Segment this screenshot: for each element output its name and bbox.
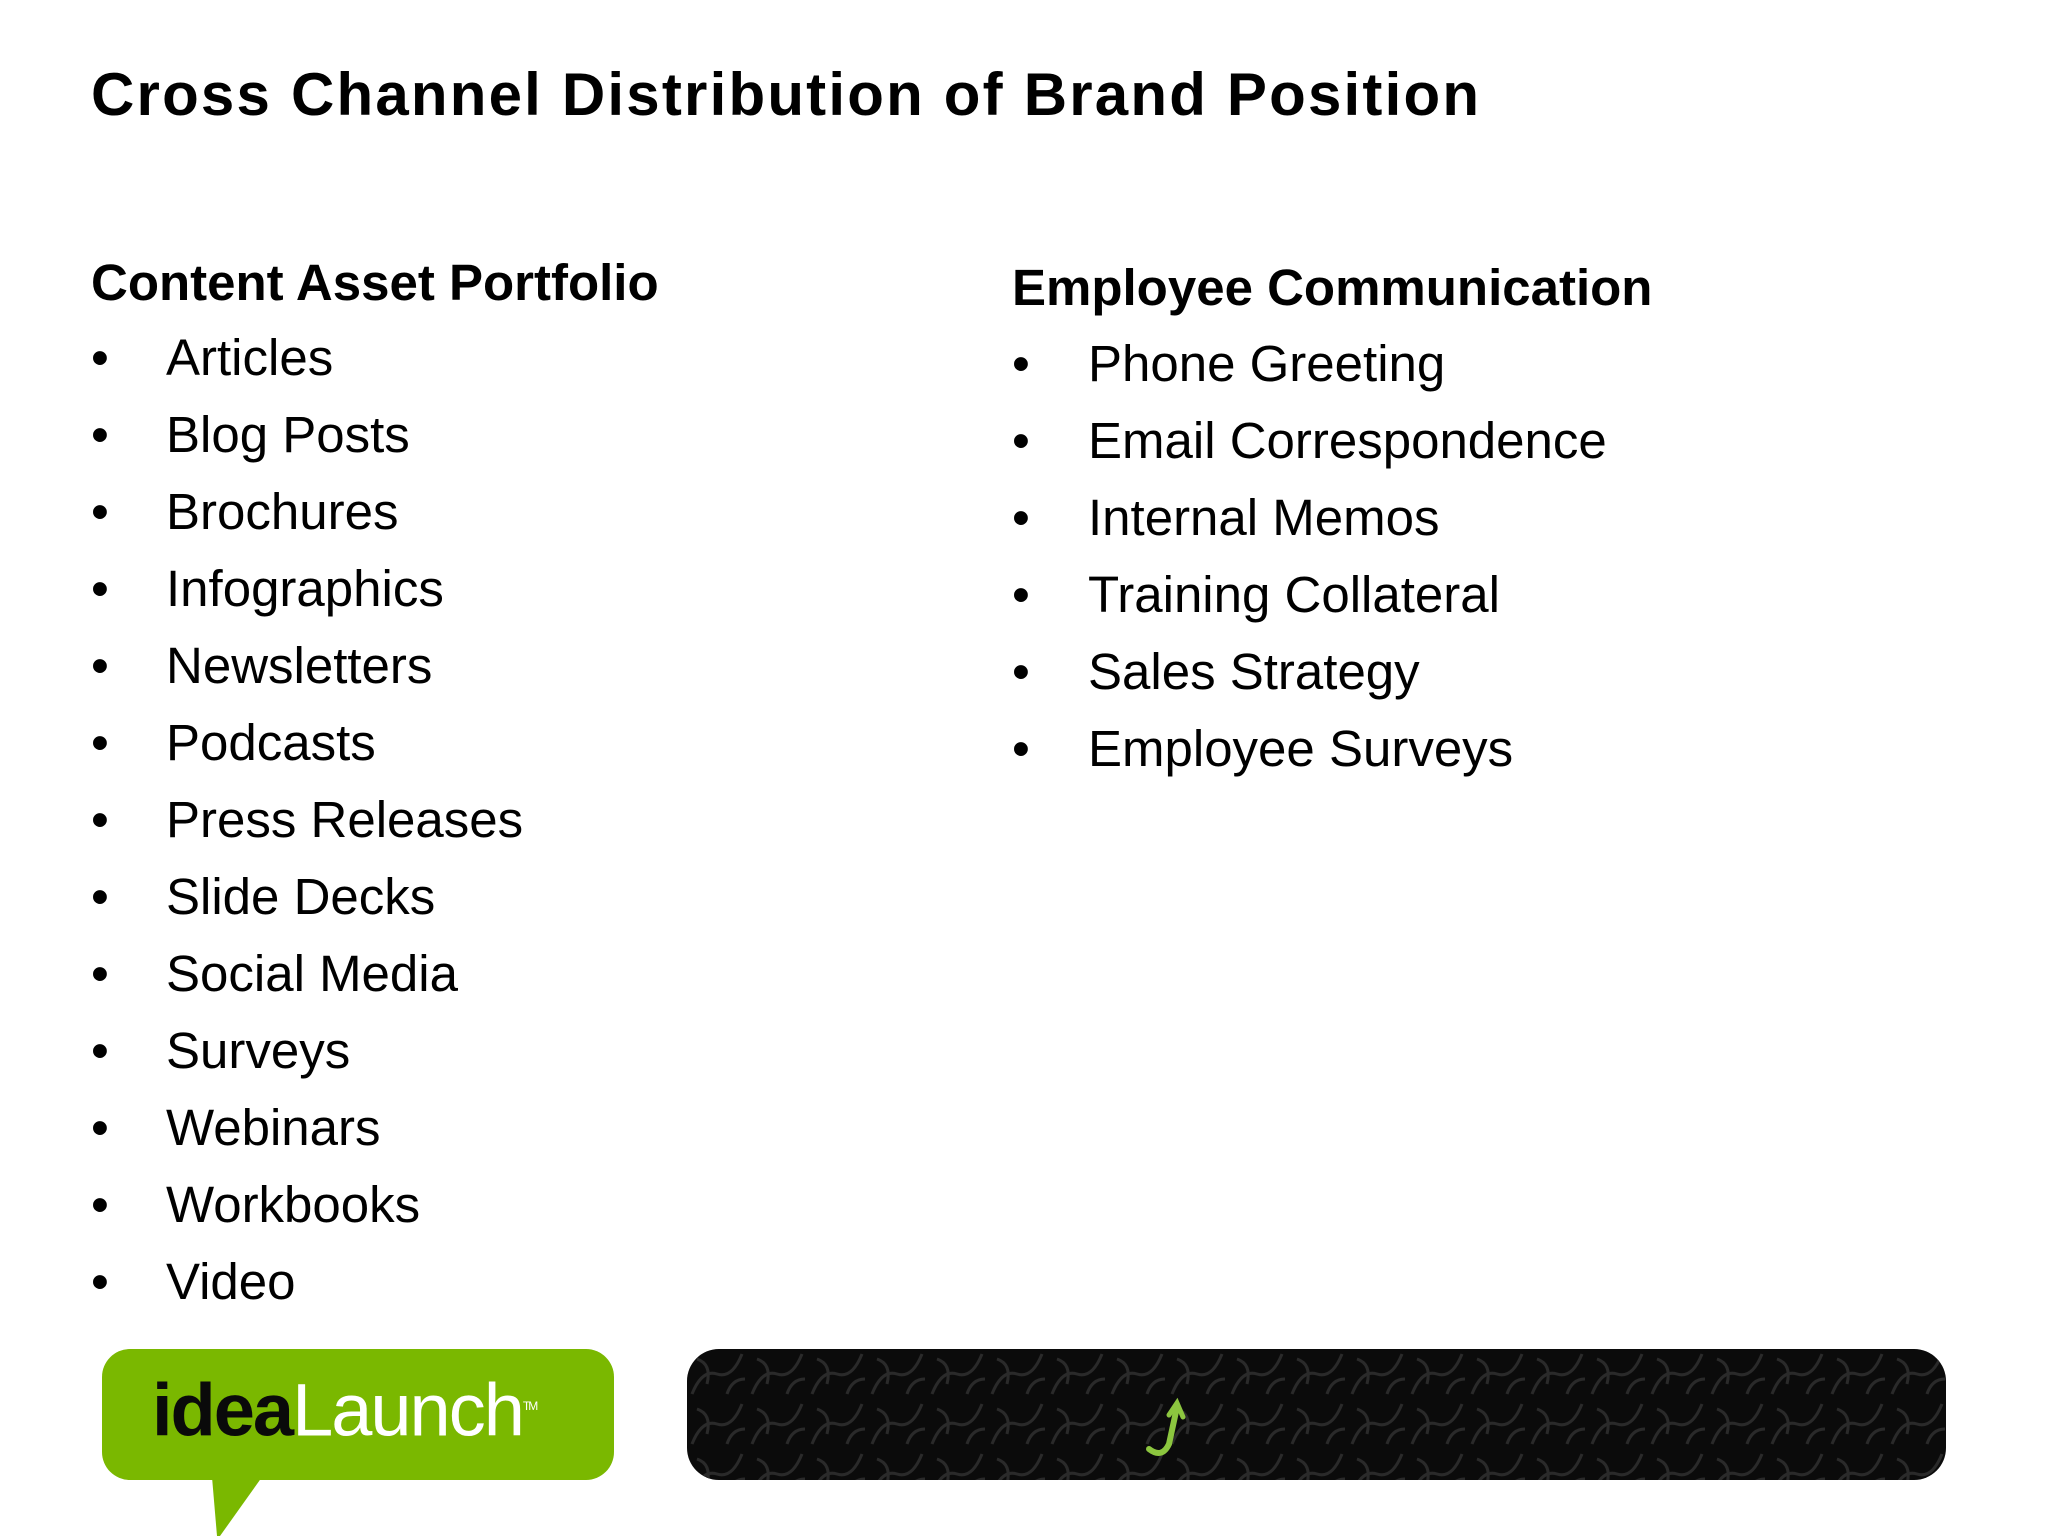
list: content assets: • [91, 483, 109, 540]
list: content assets: Articles [166, 329, 333, 386]
list: employee communication: Email Correspondence [1088, 412, 1607, 469]
list: content assets: • [91, 1022, 109, 1079]
list: employee communication: • [1012, 643, 1030, 700]
list: content assets: Brochures [166, 483, 398, 540]
list: employee communication: Internal Memos [1088, 489, 1439, 546]
list: content assets [91, 329, 523, 1310]
list: content assets: Surveys [166, 1022, 350, 1079]
list: content assets: • [91, 560, 109, 617]
list: content assets: • [91, 1253, 109, 1310]
list: content assets: Social Media [166, 945, 458, 1002]
list: employee communication: • [1012, 489, 1030, 546]
title: Cross Channel Distribution of Brand Position [91, 61, 1481, 128]
list: content assets: • [91, 1176, 109, 1233]
banner: black pattern with green arrow [687, 1349, 1946, 1480]
list: content assets: • [91, 406, 109, 463]
heading: employee communication: Employee Communication [1012, 259, 1652, 316]
list: content assets: Workbooks [166, 1176, 420, 1233]
list: content assets: Slide Decks [166, 868, 435, 925]
list: content assets: • [91, 868, 109, 925]
list: employee communication: • [1012, 335, 1030, 392]
list: employee communication: Training Collateral [1088, 566, 1500, 623]
list: employee communication: • [1012, 566, 1030, 623]
list: content assets: Podcasts [166, 714, 376, 771]
list: content assets: Video [166, 1253, 296, 1310]
list: content assets: • [91, 714, 109, 771]
list: employee communication: • [1012, 720, 1030, 777]
list: content assets: Blog Posts [166, 406, 410, 463]
list: employee communication [1012, 335, 1607, 777]
list: employee communication: Employee Surveys [1088, 720, 1513, 777]
list: content assets: • [91, 1099, 109, 1156]
heading: content asset portfolio: Content Asset Portfolio [91, 254, 659, 311]
list: content assets: Press Releases [166, 791, 523, 848]
logo: ideaLaunch speech bubble: ideaLaunchTM [152, 1369, 536, 1452]
list: content assets: Webinars [166, 1099, 380, 1156]
list: content assets: Newsletters [166, 637, 432, 694]
list: content assets: • [91, 637, 109, 694]
list: employee communication: Phone Greeting [1088, 335, 1445, 392]
list: employee communication: Sales Strategy [1088, 643, 1420, 700]
list: content assets: • [91, 791, 109, 848]
icon: green arrow [1149, 1403, 1183, 1453]
logo: ideaLaunch speech bubble [102, 1349, 614, 1536]
list: employee communication: • [1012, 412, 1030, 469]
list: content assets: • [91, 329, 109, 386]
list: content assets: Infographics [166, 560, 444, 617]
list: content assets: • [91, 945, 109, 1002]
